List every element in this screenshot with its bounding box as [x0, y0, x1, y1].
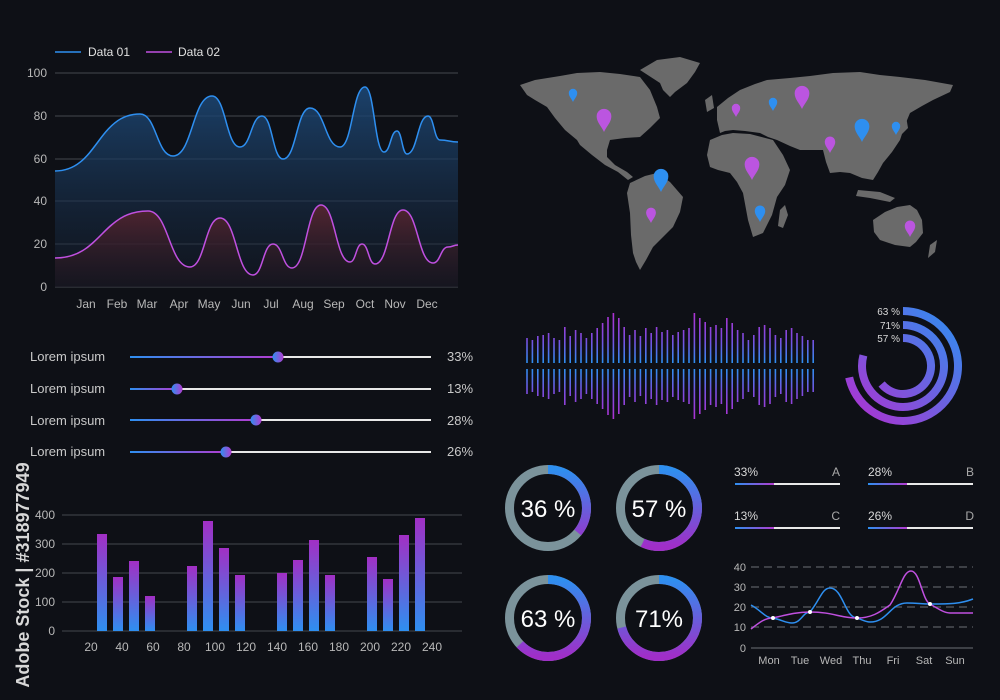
slider 2 — [30, 381, 473, 396]
world map with pins — [520, 57, 953, 270]
bar chart y labels: 300 — [35, 537, 55, 551]
bar C: 13% — [734, 509, 758, 523]
x axis month labels: Dec — [416, 297, 438, 311]
y axis labels — [27, 66, 47, 294]
slider 4 — [30, 444, 473, 459]
donut: 36%: 36 % — [521, 496, 575, 523]
concentric radial progress rings — [849, 307, 958, 421]
donut: 36% — [510, 470, 586, 546]
bar chart y labels: 400 — [35, 508, 55, 522]
week day labels: Thu — [853, 655, 871, 667]
bar C — [734, 509, 840, 529]
bar chart x labels: 100 — [205, 640, 225, 654]
week day labels: Tue — [791, 655, 809, 667]
watermark id text: Adobe Stock | #318977949 — [13, 462, 33, 688]
x axis month labels: Mar — [137, 297, 157, 311]
bar chart x labels: 20 — [84, 640, 98, 654]
slider 3: Lorem ipsum — [30, 413, 105, 428]
bar chart x labels: 240 — [422, 640, 442, 654]
continents — [520, 57, 953, 270]
bar chart y labels: 200 — [35, 566, 55, 580]
week day labels: Mon — [758, 655, 780, 667]
week y labels: 20 — [734, 602, 746, 614]
bar chart x labels: 80 — [177, 640, 191, 654]
bar chart x labels: 40 — [115, 640, 129, 654]
x axis month labels: Oct — [356, 297, 375, 311]
bar chart x labels — [84, 640, 442, 654]
slider 1: Lorem ipsum — [30, 349, 105, 364]
slider 3: 28% — [447, 413, 473, 428]
blue series — [751, 588, 973, 623]
bar D — [868, 509, 974, 529]
week y labels: 10 — [734, 622, 746, 634]
ring labels: 71% — [880, 321, 900, 332]
bar A — [734, 465, 840, 485]
y axis labels: 40 — [34, 194, 47, 208]
slider 3 — [30, 413, 473, 428]
area: data 02 — [55, 205, 458, 287]
bar D: D — [965, 509, 974, 523]
week y labels: 30 — [734, 582, 746, 594]
bar chart x labels: 180 — [329, 640, 349, 654]
slider 1: 33% — [447, 349, 473, 364]
x axis month labels: Apr — [170, 297, 188, 311]
ring labels — [877, 307, 900, 345]
y axis labels: 80 — [34, 109, 47, 123]
bar C: C — [831, 509, 840, 523]
donut: 71% — [620, 580, 698, 656]
legend: Data 02 — [178, 45, 220, 59]
week day labels: Fri — [887, 655, 899, 667]
slider 1 — [30, 349, 473, 364]
bar chart y labels — [35, 508, 55, 638]
bar chart x labels: 220 — [391, 640, 411, 654]
week y labels — [734, 562, 746, 655]
y axis labels: 60 — [34, 152, 47, 166]
x axis month labels: Aug — [292, 297, 314, 311]
bar B — [868, 465, 974, 485]
bar chart — [35, 508, 462, 654]
legend — [55, 45, 220, 59]
sliders panel — [30, 349, 473, 459]
week y labels: 0 — [740, 643, 746, 655]
bar chart x labels: 140 — [267, 640, 287, 654]
bars — [97, 518, 425, 631]
y axis labels: 0 — [40, 280, 47, 294]
slider 4: 26% — [447, 444, 473, 459]
donut: 57%: 57 % — [632, 496, 686, 523]
slider 2: Lorem ipsum — [30, 381, 105, 396]
donut: 57% — [620, 470, 698, 546]
x axis month labels: Jan — [76, 297, 96, 311]
bar D: 26% — [868, 509, 892, 523]
x axis month labels: Jun — [231, 297, 251, 311]
pins — [569, 86, 915, 237]
x axis month labels: May — [198, 297, 220, 311]
audio waveform — [527, 313, 813, 419]
bar chart y labels: 100 — [35, 595, 55, 609]
ring labels: 63 % — [877, 307, 900, 318]
bar A: 33% — [734, 465, 758, 479]
donut: 63% — [510, 580, 586, 656]
slider 4: Lorem ipsum — [30, 444, 105, 459]
x axis month labels — [76, 297, 438, 311]
donut: 63%: 63 % — [521, 606, 575, 633]
legend: Data 01 — [88, 45, 130, 59]
bar chart x labels: 60 — [146, 640, 160, 654]
slider 2: 13% — [447, 381, 473, 396]
purple series — [751, 571, 973, 629]
bar chart y labels: 0 — [48, 624, 55, 638]
week day labels: Sat — [916, 655, 932, 667]
bar chart x labels: 120 — [236, 640, 256, 654]
y axis labels: 100 — [27, 66, 47, 80]
y axis labels: 20 — [34, 237, 47, 251]
x axis month labels: Jul — [263, 297, 279, 311]
progress bars A-D — [734, 465, 974, 529]
bar chart x labels: 200 — [360, 640, 380, 654]
donut: 71%: 71% — [635, 606, 683, 633]
week day labels: Sun — [945, 655, 965, 667]
x axis month labels: Sep — [323, 297, 345, 311]
x axis month labels: Nov — [384, 297, 406, 311]
bar A: A — [832, 465, 840, 479]
week y labels: 40 — [734, 562, 746, 574]
weekly line chart — [734, 562, 973, 667]
bar B: 28% — [868, 465, 892, 479]
bar B: B — [966, 465, 974, 479]
x axis month labels: Feb — [107, 297, 128, 311]
week day labels — [758, 655, 965, 667]
week day labels: Wed — [820, 655, 842, 667]
ring labels: 57 % — [877, 334, 900, 345]
line chart: monthly data — [27, 45, 458, 311]
bar chart x labels: 160 — [298, 640, 318, 654]
area: data 01 — [55, 87, 458, 287]
